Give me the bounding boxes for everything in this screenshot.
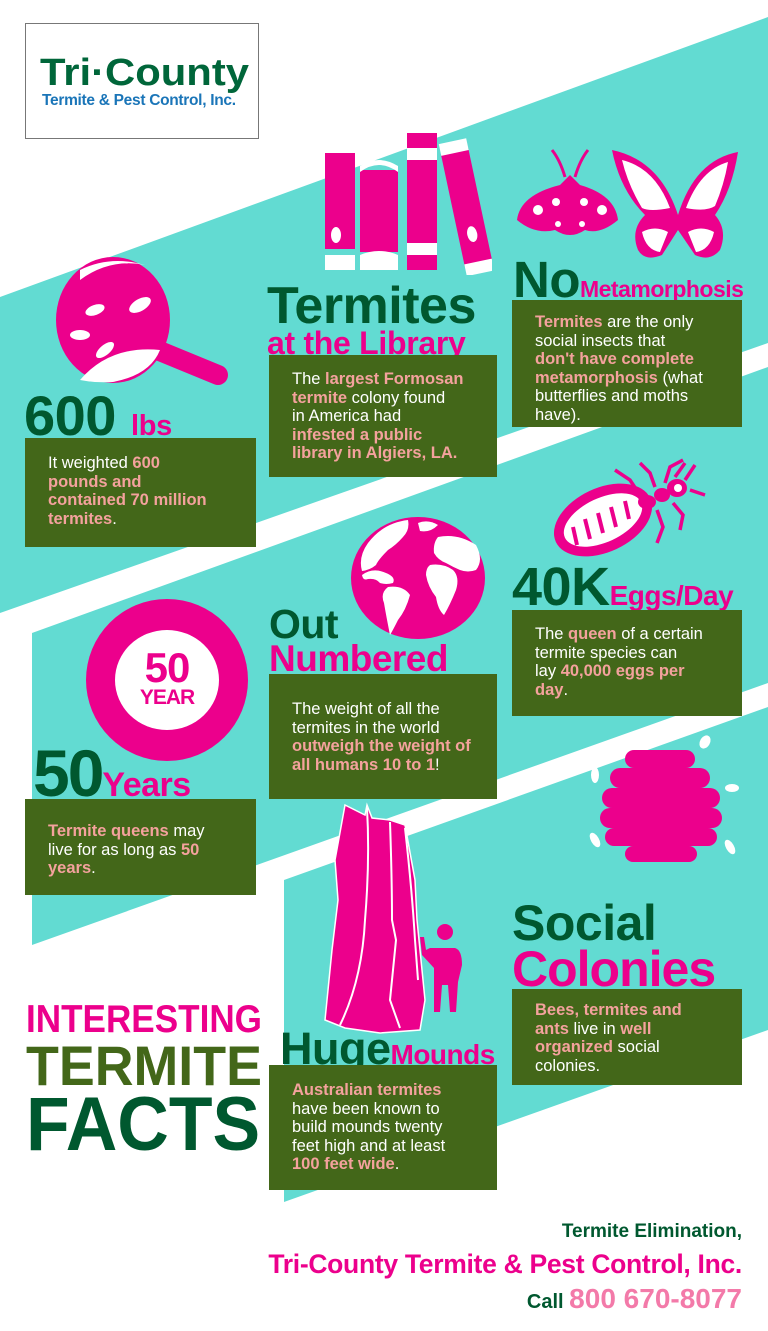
box: social colonies: ants live in well [535,1020,651,1038]
box: 40K: The queen of a certain [535,625,703,643]
box: library: termite colony found [292,388,445,406]
box: 600 lbs [25,438,256,547]
heading: Social Colonies [512,895,715,997]
box: huge mounds [269,1065,497,1190]
box: outnumbered: termites in the world [292,718,440,736]
box: 40K [512,610,742,716]
box: 600 lbs: contained 70 million [48,491,207,509]
box: metamorphosis: Termites are the only [535,313,693,331]
icon: 50 year badge [86,599,248,761]
icon: moth and butterfly [517,149,738,258]
box: 50 years: live for as long as 50 [48,840,199,858]
heading: 50 Years: 50Years [33,736,191,810]
box: metamorphosis: social insects that [535,332,665,350]
icon: termite [554,458,706,556]
heading: No Metamorphosis: NoMetamorphosis [513,251,743,308]
box: 50 years: Termite queens may [48,822,204,840]
box: huge mounds: have been known to [292,1100,440,1118]
box: metamorphosis [512,300,742,427]
box: huge mounds: feet high and at least [292,1136,445,1154]
box: 600 lbs: pounds and [48,472,142,490]
icon: 50 year badge: YEAR [140,686,194,709]
title: Interesting Termite Facts [26,998,262,1167]
title: Interesting Termite Facts: FACTS [26,1082,260,1167]
box: metamorphosis: metamorphosis (what [535,368,703,386]
box: metamorphosis: have). [535,406,581,424]
heading: Out Numbered: Out [269,601,338,647]
box: social colonies: Bees, termites and [535,1001,682,1019]
box: 40K: lay 40,000 eggs per [535,662,685,680]
box: 600 lbs: It weighted 600 [48,454,160,472]
box: library [269,355,497,477]
heading: Out Numbered: Numbered [269,638,448,679]
footer contact: Call 800 670-8077 [527,1282,742,1314]
icon: magnifier [56,257,228,385]
title: Interesting Termite Facts: INTERESTING [26,998,262,1041]
box: 50 years: years. [48,859,96,877]
box: outnumbered: The weight of all the [292,700,440,718]
heading: Termites at the Library: Termites [267,277,476,335]
footer contact: Tri-County Termite & Pest Control, Inc. [268,1249,742,1279]
box: metamorphosis: butterflies and moths [535,387,688,405]
box: huge mounds: build mounds twenty [292,1118,442,1136]
box: social colonies: organized social [535,1038,660,1056]
footer contact [268,1221,742,1314]
heading: Termites at the Library [267,277,476,361]
heading: Huge Mounds: HugeMounds [280,1023,495,1074]
title: Interesting Termite Facts: TERMITE [26,1034,262,1097]
heading: 600 lbs: 600 lbs [24,384,172,447]
box: huge mounds: 100 feet wide. [292,1155,399,1173]
box: library: infested a public [292,426,422,444]
box: outnumbered [269,674,497,799]
heading: Out Numbered [269,601,448,679]
box: huge mounds: Australian termites [292,1081,441,1099]
box: outnumbered: all humans 10 to 1! [292,756,440,774]
box: library: The largest Formosan [292,370,464,388]
logo: Tri·County [40,52,249,94]
box: metamorphosis: don't have complete [535,350,694,368]
box: social colonies [512,989,742,1085]
box: library: in America had [292,407,401,425]
box: 40K: day. [535,680,568,698]
icon: books [325,133,492,275]
heading: 40K Eggs/Day: 40KEggs/Day [512,557,733,617]
heading: Social Colonies: Social [512,895,656,951]
icon: mound and person [324,802,462,1034]
box: library: library in Algiers, LA. [292,444,457,462]
icon: 50 year badge: 50 [145,644,189,691]
footer contact: Termite Elimination, [562,1221,742,1242]
box: outnumbered: outweigh the weight of [292,737,471,755]
logo: Termite & Pest Control, Inc. [42,92,236,109]
box: social colonies: colonies. [535,1056,600,1074]
box: 600 lbs: termites. [48,510,117,528]
icon: beehive [590,735,739,862]
logo [25,23,259,139]
box: 40K: termite species can [535,644,677,662]
icon: globe [351,517,485,639]
heading: Termites at the Library: at the Library [267,325,466,361]
heading: Social Colonies: Colonies [512,941,715,997]
box: 50 years [25,799,256,895]
